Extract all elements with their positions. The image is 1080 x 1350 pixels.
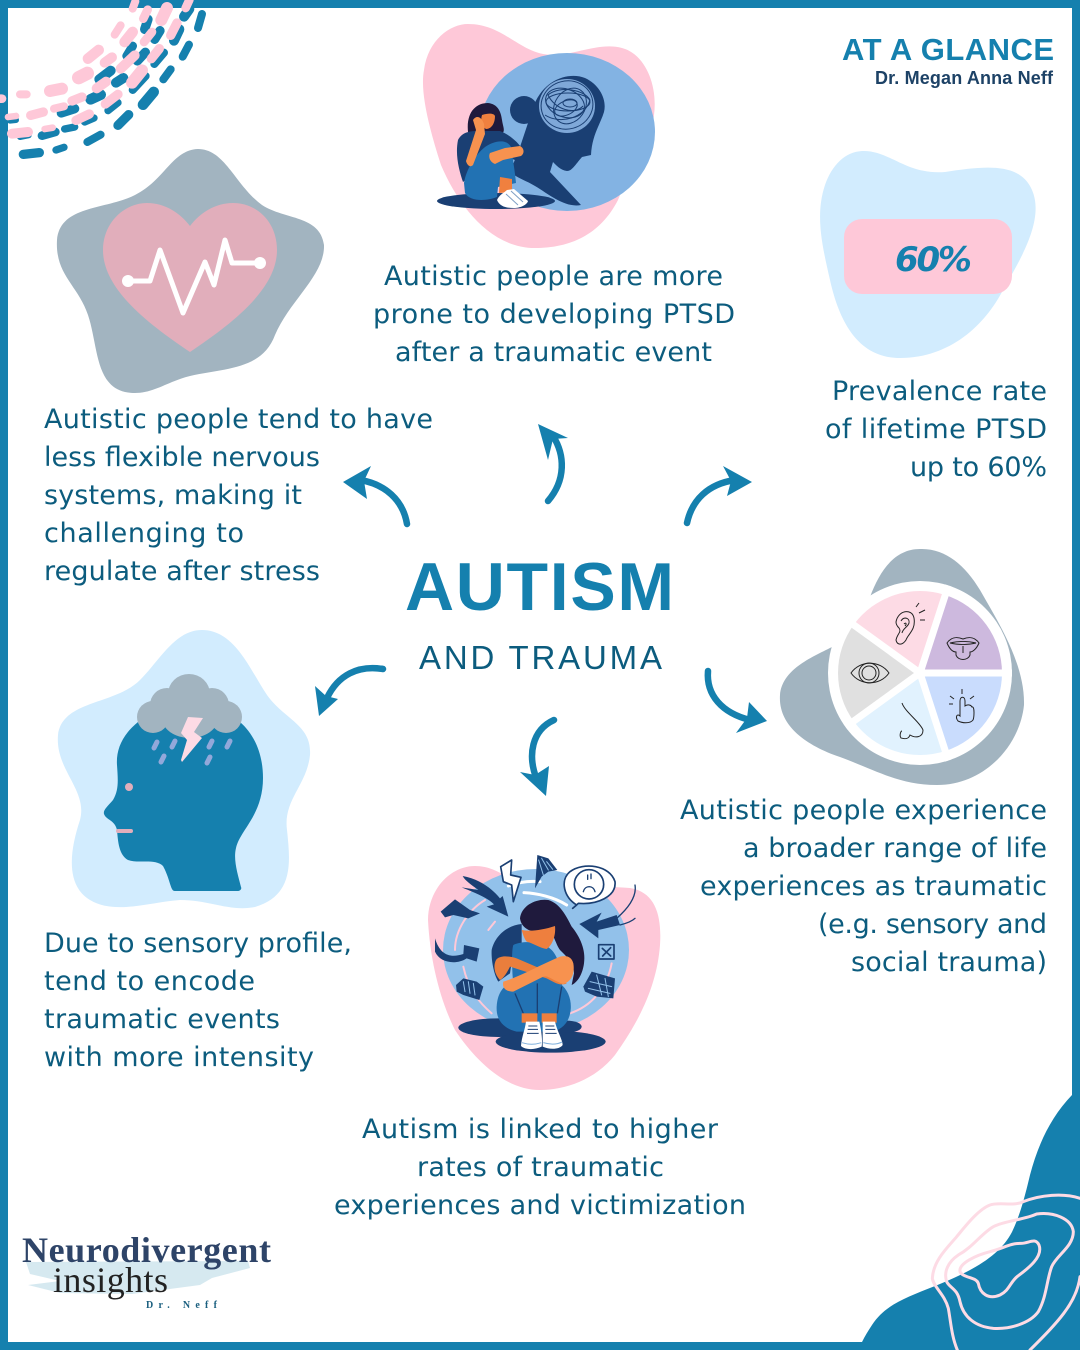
arrow: to upper left — [343, 466, 407, 524]
text block: higher rates of victimization: Autism is linked to higher — [362, 1114, 719, 1145]
decoration: blue blob with contour lines bottom-right — [862, 1095, 1080, 1350]
text block: encode with intensity — [44, 928, 352, 1073]
text block: broader range of experiences: a broader range of life — [743, 833, 1047, 864]
text block: less flexible nervous systems: regulate after stress — [44, 556, 320, 587]
text block: prevalence rate: Prevalence rate — [832, 376, 1047, 407]
wedge: sight — [838, 625, 920, 721]
logo: Neurodivergent Insights: Neurodivergent — [22, 1230, 271, 1270]
main title — [405, 549, 674, 676]
stat panel: 60 percent — [820, 151, 1036, 358]
text block: broader range of experiences: Autistic people experience — [680, 795, 1047, 826]
icon: stress scribbles and symbols — [435, 855, 635, 1000]
wedge: touch — [920, 673, 1002, 751]
logo: Neurodivergent Insights — [22, 1230, 271, 1311]
arrow: to upper right — [687, 466, 752, 523]
text block: more prone to PTSD: Autistic people are more — [384, 261, 723, 292]
illustration: head with storm cloud — [58, 630, 310, 908]
heading: at a glance: AT A GLANCE — [842, 32, 1054, 67]
wedge: smell — [854, 673, 945, 755]
text block: broader range of experiences: experiences as traumatic — [700, 871, 1047, 902]
text block: broader range of experiences: social trauma) — [851, 947, 1047, 978]
text block: encode with intensity: Due to sensory profile, — [44, 928, 352, 959]
illustration: woman with tangled-brain shadow — [423, 24, 655, 248]
text block: prevalence rate — [825, 376, 1047, 483]
logo: Neurodivergent Insights: Dr. Neff — [146, 1300, 218, 1311]
heading: at a glance: Dr. Megan Anna Neff — [875, 68, 1054, 88]
wedge: taste — [920, 595, 1002, 673]
text block: prevalence rate: up to 60% — [910, 452, 1047, 483]
arrow: to lower right — [708, 671, 767, 733]
text block: higher rates of victimization — [334, 1114, 746, 1221]
arrow: to top centre — [538, 424, 568, 501]
text block: encode with intensity: with more intensity — [44, 1042, 314, 1073]
icon: tongue — [947, 638, 979, 660]
text block: broader range of experiences — [680, 795, 1047, 978]
text block: higher rates of victimization: rates of traumatic — [417, 1152, 664, 1183]
text block: less flexible nervous systems: systems, making it — [44, 480, 302, 511]
text block: less flexible nervous systems: Autistic people tend to have — [44, 404, 433, 435]
text block: less flexible nervous systems — [44, 404, 433, 587]
text block: encode with intensity: tend to encode — [44, 966, 255, 997]
text block: encode with intensity: traumatic events — [44, 1004, 280, 1035]
arrow: to lower left — [315, 668, 383, 716]
stat panel: 60 percent: 60% — [895, 240, 972, 280]
logo: Neurodivergent Insights: insights — [53, 1260, 168, 1300]
icon: ear — [896, 603, 925, 644]
illustration: five senses wheel — [780, 549, 1024, 785]
text block: more prone to PTSD: after a traumatic event — [395, 337, 712, 368]
icon: nose — [900, 703, 923, 739]
icon: pointing hand — [949, 689, 974, 723]
main title: AND TRAUMA — [419, 639, 662, 676]
decoration: dashed arcs top-left — [0, 0, 202, 154]
text block: less flexible nervous systems: less flexible nervous — [44, 442, 320, 473]
text block: broader range of experiences: (e.g. sensory and — [818, 909, 1047, 940]
icon: eye — [851, 663, 889, 683]
text block: less flexible nervous systems: challenging to — [44, 518, 244, 549]
arrow: to bottom centre — [520, 720, 554, 796]
heading: at a glance — [842, 32, 1054, 88]
wedge: hearing — [854, 591, 945, 673]
text block: higher rates of victimization: experiences and victimization — [334, 1190, 746, 1221]
main title: AUTISM — [405, 549, 674, 625]
text block: more prone to PTSD: prone to developing PTSD — [373, 299, 735, 330]
text block: more prone to PTSD — [373, 261, 735, 368]
illustration: heart with pulse line — [57, 149, 324, 393]
text block: prevalence rate: of lifetime PTSD — [825, 414, 1047, 445]
illustration: woman hugging knees — [428, 855, 660, 1090]
